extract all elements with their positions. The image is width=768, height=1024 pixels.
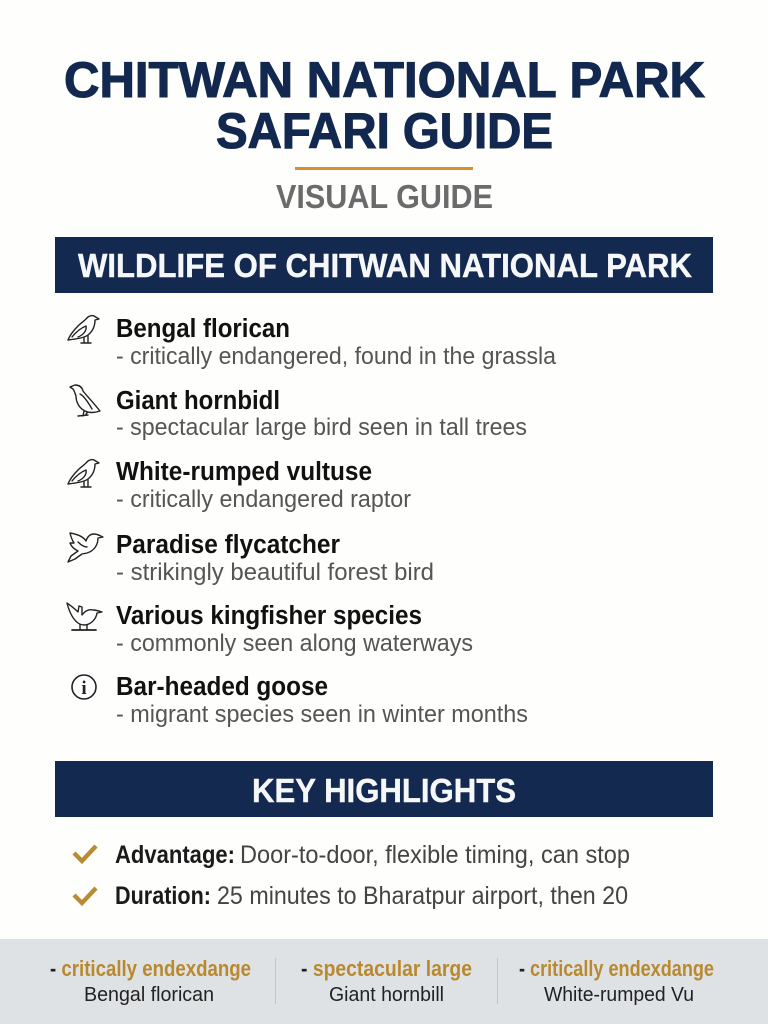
footer divider bbox=[497, 958, 498, 1004]
title bbox=[64, 52, 705, 159]
header bbox=[64, 52, 705, 215]
highlight: advantage: Door-to-door, flexible timing, can stop bbox=[240, 841, 630, 869]
highlight: duration: Duration: bbox=[115, 882, 211, 910]
footer divider bbox=[275, 958, 276, 1004]
panel: key highlights heading bbox=[55, 761, 713, 817]
footer item: Bengal florican: Bengal florican bbox=[84, 984, 214, 1006]
item: Kingfisher species bbox=[67, 602, 473, 657]
item: Bengal florican: - critically endangered, found in the grassla bbox=[116, 343, 557, 370]
title underline bbox=[295, 167, 473, 170]
item: White-rumped vulture bbox=[68, 458, 411, 513]
item: Kingfisher species: Various kingfisher species bbox=[116, 602, 422, 630]
footer item: Bengal florican bbox=[50, 956, 251, 1006]
item: Bar-headed goose bbox=[72, 673, 528, 728]
footer item: Giant hornbill: - spectacular large bbox=[301, 956, 472, 981]
icon: information circle bbox=[72, 675, 96, 699]
icon: bird bbox=[68, 316, 99, 343]
panel: wildlife heading: WILDLIFE OF CHITWAN NATIONAL PARK bbox=[78, 247, 692, 284]
item: White-rumped vulture: White-rumped vultuse bbox=[116, 458, 372, 486]
highlight: advantage: Advantage: bbox=[115, 841, 235, 869]
footer item: White-rumped vulture: - critically endexdange bbox=[519, 956, 714, 981]
title: SAFARI GUIDE bbox=[216, 103, 553, 159]
title: CHITWAN NATIONAL PARK bbox=[64, 52, 705, 108]
item: Giant hornbill bbox=[70, 385, 527, 441]
icon: check mark bbox=[74, 888, 96, 903]
item: Paradise flycatcher: Paradise flycatcher bbox=[116, 531, 340, 559]
panel: footer strip bbox=[0, 939, 768, 1024]
footer item: White-rumped vulture bbox=[519, 956, 714, 1006]
icon: check mark bbox=[74, 846, 96, 861]
item: Bar-headed goose: Bar-headed goose bbox=[116, 673, 328, 701]
item: Paradise flycatcher bbox=[68, 531, 434, 586]
item: Giant hornbill: Giant hornbidl bbox=[116, 387, 280, 415]
item: White-rumped vulture: - critically endangered raptor bbox=[116, 486, 411, 513]
item: Bar-headed goose: - migrant species seen in winter months bbox=[116, 701, 528, 728]
item: Paradise flycatcher: - strikingly beautiful forest bird bbox=[116, 559, 434, 586]
item: Bengal florican bbox=[68, 315, 557, 370]
icon: bird in flight bbox=[68, 533, 103, 562]
footer item: Giant hornbill: Giant hornbill bbox=[329, 984, 444, 1006]
highlight: advantage bbox=[74, 841, 630, 869]
footer item: Giant hornbill bbox=[301, 956, 472, 1006]
item: Kingfisher species: - commonly seen along waterways bbox=[116, 630, 473, 657]
panel: wildlife heading bbox=[55, 237, 713, 293]
highlight: duration: 25 minutes to Bharatpur airport, then 20 bbox=[217, 882, 628, 910]
icon: bird bbox=[68, 460, 99, 487]
item: Giant hornbill: - spectacular large bird seen in tall trees bbox=[116, 414, 527, 441]
footer item: White-rumped vulture: White-rumped Vu bbox=[544, 984, 694, 1006]
panel: wildlife list bbox=[67, 315, 557, 728]
panel: key highlights list bbox=[74, 841, 630, 910]
subtitle: VISUAL GUIDE bbox=[276, 178, 493, 215]
icon: bird on waterline bbox=[67, 603, 102, 630]
panel: key highlights heading: KEY HIGHLIGHTS bbox=[252, 772, 516, 809]
icon: bird bbox=[70, 385, 100, 416]
item: Bengal florican: Bengal florican bbox=[116, 315, 290, 343]
icon: information circle: i bbox=[81, 678, 87, 699]
footer item: Bengal florican: - critically endexdange bbox=[50, 956, 251, 981]
